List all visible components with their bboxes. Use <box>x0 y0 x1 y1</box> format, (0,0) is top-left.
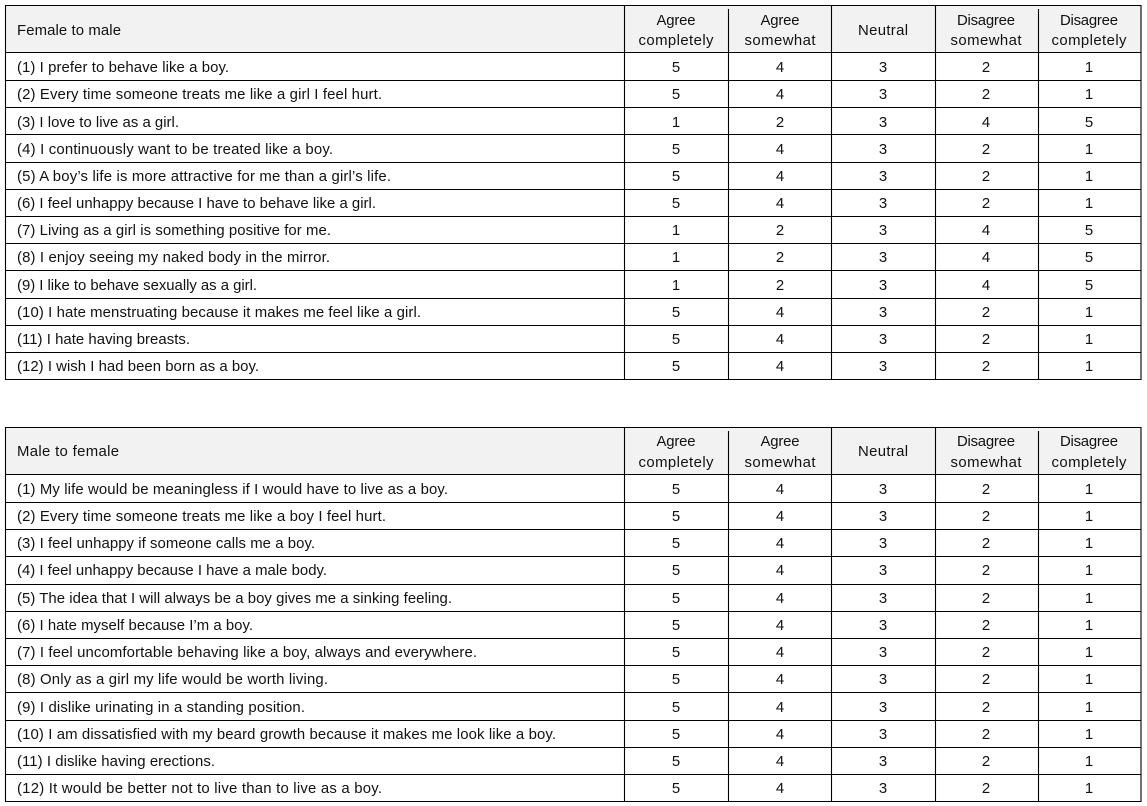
row 6: 3 <box>879 196 887 212</box>
row 12: 1 <box>1085 781 1093 797</box>
row 9: 5 <box>1085 278 1093 294</box>
row 12: (12) I wish I had been born as a boy. <box>17 359 259 375</box>
row 5: 3 <box>879 169 887 185</box>
header row: male to female: Neutral <box>858 444 908 460</box>
row 8: 3 <box>879 672 887 688</box>
row 11: 2 <box>982 754 990 770</box>
row 8: 2 <box>776 250 784 266</box>
row 11 <box>17 754 1093 770</box>
row 2: 3 <box>879 87 887 103</box>
row 10: 1 <box>1085 727 1093 743</box>
row 11: 2 <box>982 332 990 348</box>
row 5: 1 <box>1085 169 1093 185</box>
row 5: (5) The idea that I will always be a boy gives me a sinking feeling. <box>17 591 452 607</box>
row 3: 5 <box>1085 115 1093 131</box>
row 10: (10) I hate menstruating because it makes me feel like a girl. <box>17 305 421 321</box>
row 3 <box>17 115 1093 131</box>
table grid lines <box>6 6 1141 380</box>
row 7: 3 <box>879 223 887 239</box>
row 9: 4 <box>776 700 784 716</box>
row 10: 4 <box>776 727 784 743</box>
row 10: 4 <box>776 305 784 321</box>
row 5: 2 <box>982 169 990 185</box>
row 1 <box>17 60 1093 76</box>
row 6: (6) I hate myself because I’m a boy. <box>17 618 253 634</box>
row 11: 5 <box>672 754 680 770</box>
row 4: (4) I feel unhappy because I have a male body. <box>17 563 327 579</box>
row 11: 1 <box>1085 332 1093 348</box>
row 11: 4 <box>776 754 784 770</box>
row 10: 2 <box>982 305 990 321</box>
header row: male to female: completely <box>1052 455 1127 471</box>
row 11: (11) I hate having breasts. <box>17 332 190 348</box>
row 8: 2 <box>982 672 990 688</box>
row 12: 3 <box>879 359 887 375</box>
header row: male to female <box>6 428 1141 474</box>
row 10: 5 <box>672 727 680 743</box>
row 1: 5 <box>672 60 680 76</box>
row 6 <box>17 196 1093 212</box>
row 1: 3 <box>879 482 887 498</box>
row 4: 5 <box>672 142 680 158</box>
row 8: 4 <box>776 672 784 688</box>
row 4: 1 <box>1085 142 1093 158</box>
row 9: 3 <box>879 278 887 294</box>
header row: male to female: Male to female <box>17 444 119 460</box>
row 12 <box>17 359 1093 375</box>
row 2: 4 <box>776 87 784 103</box>
row 8: 5 <box>672 672 680 688</box>
row 5: 1 <box>1085 591 1093 607</box>
row 12: 4 <box>776 781 784 797</box>
row 1: 1 <box>1085 60 1093 76</box>
row 7: 1 <box>1085 645 1093 661</box>
row 4 <box>17 142 1093 158</box>
row 6: 1 <box>1085 196 1093 212</box>
row 10: 1 <box>1085 305 1093 321</box>
row 9 <box>17 700 1093 716</box>
row 3: 1 <box>1085 536 1093 552</box>
row 6: 2 <box>982 618 990 634</box>
row 2: (2) Every time someone treats me like a boy I feel hurt. <box>17 509 386 525</box>
row 2: 2 <box>982 87 990 103</box>
row 5 <box>17 591 1093 607</box>
row 5: 3 <box>879 591 887 607</box>
row 9: (9) I like to behave sexually as a girl. <box>17 278 257 294</box>
row 5 <box>17 169 1093 185</box>
row 4: 2 <box>982 142 990 158</box>
row 2 <box>17 509 1093 525</box>
row 5: 5 <box>672 169 680 185</box>
header row: male to female: Disagree <box>1060 434 1118 450</box>
row 6: 4 <box>776 196 784 212</box>
row 7 <box>17 223 1093 239</box>
row 10: 5 <box>672 305 680 321</box>
row 8: (8) I enjoy seeing my naked body in the mirror. <box>17 250 330 266</box>
row 4: 4 <box>776 563 784 579</box>
table grid lines <box>6 428 1141 802</box>
row 1: 3 <box>879 60 887 76</box>
row 8 <box>17 672 1093 688</box>
header row: male to female: completely <box>638 455 714 471</box>
row 1: 2 <box>982 60 990 76</box>
row 11: 3 <box>879 754 887 770</box>
row 2: 1 <box>1085 87 1093 103</box>
row 8: (8) Only as a girl my life would be worth living. <box>17 672 328 688</box>
row 5: (5) A boy’s life is more attractive for me than a girl’s life. <box>17 169 391 185</box>
row 12: (12) It would be better not to live than to live as a boy. <box>17 781 382 797</box>
header row: female to male: Female to male <box>17 23 121 39</box>
row 11: 4 <box>776 332 784 348</box>
row 3: (3) I feel unhappy if someone calls me a boy. <box>17 536 315 552</box>
row 8: 1 <box>672 250 680 266</box>
row 1: 4 <box>776 60 784 76</box>
row 7: 2 <box>982 645 990 661</box>
header row: female to male: somewhat <box>744 33 816 49</box>
row 7: 2 <box>776 223 784 239</box>
row 5: 4 <box>776 169 784 185</box>
header row: female to male: somewhat <box>950 33 1022 49</box>
row 2: 5 <box>672 509 680 525</box>
row 10: 3 <box>879 727 887 743</box>
row 12 <box>17 781 1093 797</box>
row 8: 4 <box>982 250 990 266</box>
row 3: 2 <box>776 115 784 131</box>
row 9: 5 <box>672 700 680 716</box>
row 3 <box>17 536 1093 552</box>
row 7: 5 <box>672 645 680 661</box>
row 8: 3 <box>879 250 887 266</box>
row 3: 4 <box>982 115 990 131</box>
row 6: 3 <box>879 618 887 634</box>
row 8: 1 <box>1085 672 1093 688</box>
header row: female to male <box>6 6 1141 52</box>
row 12: 3 <box>879 781 887 797</box>
row 7: 1 <box>672 223 680 239</box>
row 2: 1 <box>1085 509 1093 525</box>
row 6: (6) I feel unhappy because I have to behave like a girl. <box>17 196 376 212</box>
row 11: 3 <box>879 332 887 348</box>
row 4: 2 <box>982 563 990 579</box>
row 3: 5 <box>672 536 680 552</box>
header row: male to female: somewhat <box>950 455 1022 471</box>
row 11: 5 <box>672 332 680 348</box>
row 9: 2 <box>982 700 990 716</box>
row 8: 5 <box>1085 250 1093 266</box>
table: female to male <box>6 6 1141 380</box>
header row: male to female: Agree <box>760 434 800 450</box>
row 9 <box>17 278 1093 294</box>
header row: female to male: Disagree <box>957 13 1015 29</box>
row 12: 4 <box>776 359 784 375</box>
row 2: 2 <box>982 509 990 525</box>
header row: female to male: Neutral <box>858 23 908 39</box>
row 1 <box>17 482 1093 498</box>
row 2: 3 <box>879 509 887 525</box>
row 12: 5 <box>672 359 680 375</box>
row 4: 4 <box>776 142 784 158</box>
header row: female to male: Agree <box>656 13 696 29</box>
row 1: (1) I prefer to behave like a boy. <box>17 60 229 76</box>
row 9: (9) I dislike urinating in a standing position. <box>17 700 305 716</box>
row 6 <box>17 618 1093 634</box>
row 5: 5 <box>672 591 680 607</box>
row 8 <box>17 250 1093 266</box>
row 6: 5 <box>672 618 680 634</box>
header row: female to male: completely <box>638 33 714 49</box>
row 3: 3 <box>879 115 887 131</box>
row 10: (10) I am dissatisfied with my beard growth because it makes me look like a boy. <box>17 727 556 743</box>
row 7: 5 <box>1085 223 1093 239</box>
row 12: 1 <box>1085 359 1093 375</box>
row 5: 4 <box>776 591 784 607</box>
row 3: (3) I love to live as a girl. <box>17 115 179 131</box>
row 1: 1 <box>1085 482 1093 498</box>
row 2: 4 <box>776 509 784 525</box>
row 12: 2 <box>982 781 990 797</box>
row 10 <box>17 727 1093 743</box>
row 4: (4) I continuously want to be treated like a boy. <box>17 142 333 158</box>
row 6: 1 <box>1085 618 1093 634</box>
row 10: 3 <box>879 305 887 321</box>
row 4: 1 <box>1085 563 1093 579</box>
row 1: 5 <box>672 482 680 498</box>
header row: male to female: somewhat <box>744 455 816 471</box>
row 2 <box>17 87 1093 103</box>
row 7: 4 <box>776 645 784 661</box>
row 10: 2 <box>982 727 990 743</box>
row 5: 2 <box>982 591 990 607</box>
row 7: (7) I feel uncomfortable behaving like a boy, always and everywhere. <box>17 645 477 661</box>
row 11: (11) I dislike having erections. <box>17 754 215 770</box>
row 7: (7) Living as a girl is something positive for me. <box>17 223 331 239</box>
row 12: 5 <box>672 781 680 797</box>
row 9: 2 <box>776 278 784 294</box>
row 2: (2) Every time someone treats me like a girl I feel hurt. <box>17 87 382 103</box>
row 4: 3 <box>879 563 887 579</box>
row 7: 4 <box>982 223 990 239</box>
row 3: 3 <box>879 536 887 552</box>
row 7 <box>17 645 1093 661</box>
table: male to female <box>6 428 1141 802</box>
row 9: 1 <box>672 278 680 294</box>
row 1: 2 <box>982 482 990 498</box>
row 6: 4 <box>776 618 784 634</box>
row 3: 1 <box>672 115 680 131</box>
row 4 <box>17 563 1093 579</box>
row 1: 4 <box>776 482 784 498</box>
row 2: 5 <box>672 87 680 103</box>
row 6: 5 <box>672 196 680 212</box>
row 9: 1 <box>1085 700 1093 716</box>
row 12: 2 <box>982 359 990 375</box>
header row: female to male: Agree <box>760 13 800 29</box>
row 11 <box>17 332 1093 348</box>
row 10 <box>17 305 1093 321</box>
header row: male to female: Disagree <box>957 434 1015 450</box>
row 4: 3 <box>879 142 887 158</box>
row 4: 5 <box>672 563 680 579</box>
row 3: 2 <box>982 536 990 552</box>
header row: female to male: completely <box>1052 33 1127 49</box>
row 6: 2 <box>982 196 990 212</box>
row 9: 3 <box>879 700 887 716</box>
row 9: 4 <box>982 278 990 294</box>
row 11: 1 <box>1085 754 1093 770</box>
header row: male to female: Agree <box>656 434 696 450</box>
row 3: 4 <box>776 536 784 552</box>
header row: female to male: Disagree <box>1060 13 1118 29</box>
row 1: (1) My life would be meaningless if I would have to live as a boy. <box>17 482 448 498</box>
row 7: 3 <box>879 645 887 661</box>
